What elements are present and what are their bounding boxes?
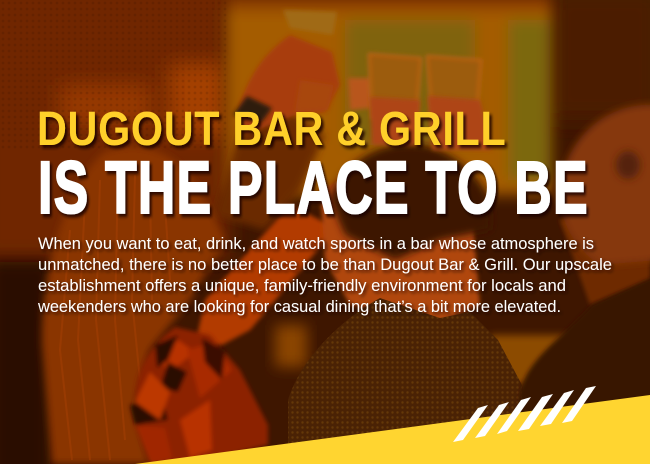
body paragraph: unmatched, there is no better place to be than Dugout Bar & Grill. Our upscale — [38, 255, 612, 274]
title line 2: IS THE PLACE TO BE — [38, 146, 587, 229]
yellow corner banner — [135, 395, 650, 464]
plaid shirt — [130, 327, 268, 464]
glass in hand — [283, 10, 337, 35]
body paragraph: weekenders who are looking for casual dining that’s a bit more elevated. — [37, 297, 561, 316]
body paragraph: When you want to eat, drink, and watch sports in a bar whose atmosphere is — [38, 234, 594, 253]
icon: white diagonal stripes — [453, 386, 596, 442]
body paragraph — [37, 234, 612, 316]
blurred room backdrop — [0, 0, 650, 260]
woman's hair — [42, 146, 225, 464]
wristband — [233, 96, 272, 122]
title line 1: DUGOUT BAR & GRILL — [37, 102, 506, 156]
sleeve beside hand — [215, 112, 325, 230]
body paragraph: establishment offers a unique, family-friendly environment for locals and — [38, 276, 566, 295]
amber floor glow — [275, 325, 307, 367]
central man's hair — [330, 144, 491, 260]
screen on the wall — [226, 0, 552, 195]
right man's hair — [560, 105, 650, 265]
hair streaks — [60, 170, 170, 460]
raised hand — [238, 35, 340, 135]
lower-left dark area — [0, 262, 50, 464]
raised arm — [195, 205, 336, 345]
central man's checked shirt — [288, 298, 522, 464]
right man's shirt — [510, 274, 650, 464]
central man's neck — [320, 150, 480, 322]
toasting glasses — [348, 78, 372, 110]
right man's neck — [560, 220, 650, 305]
